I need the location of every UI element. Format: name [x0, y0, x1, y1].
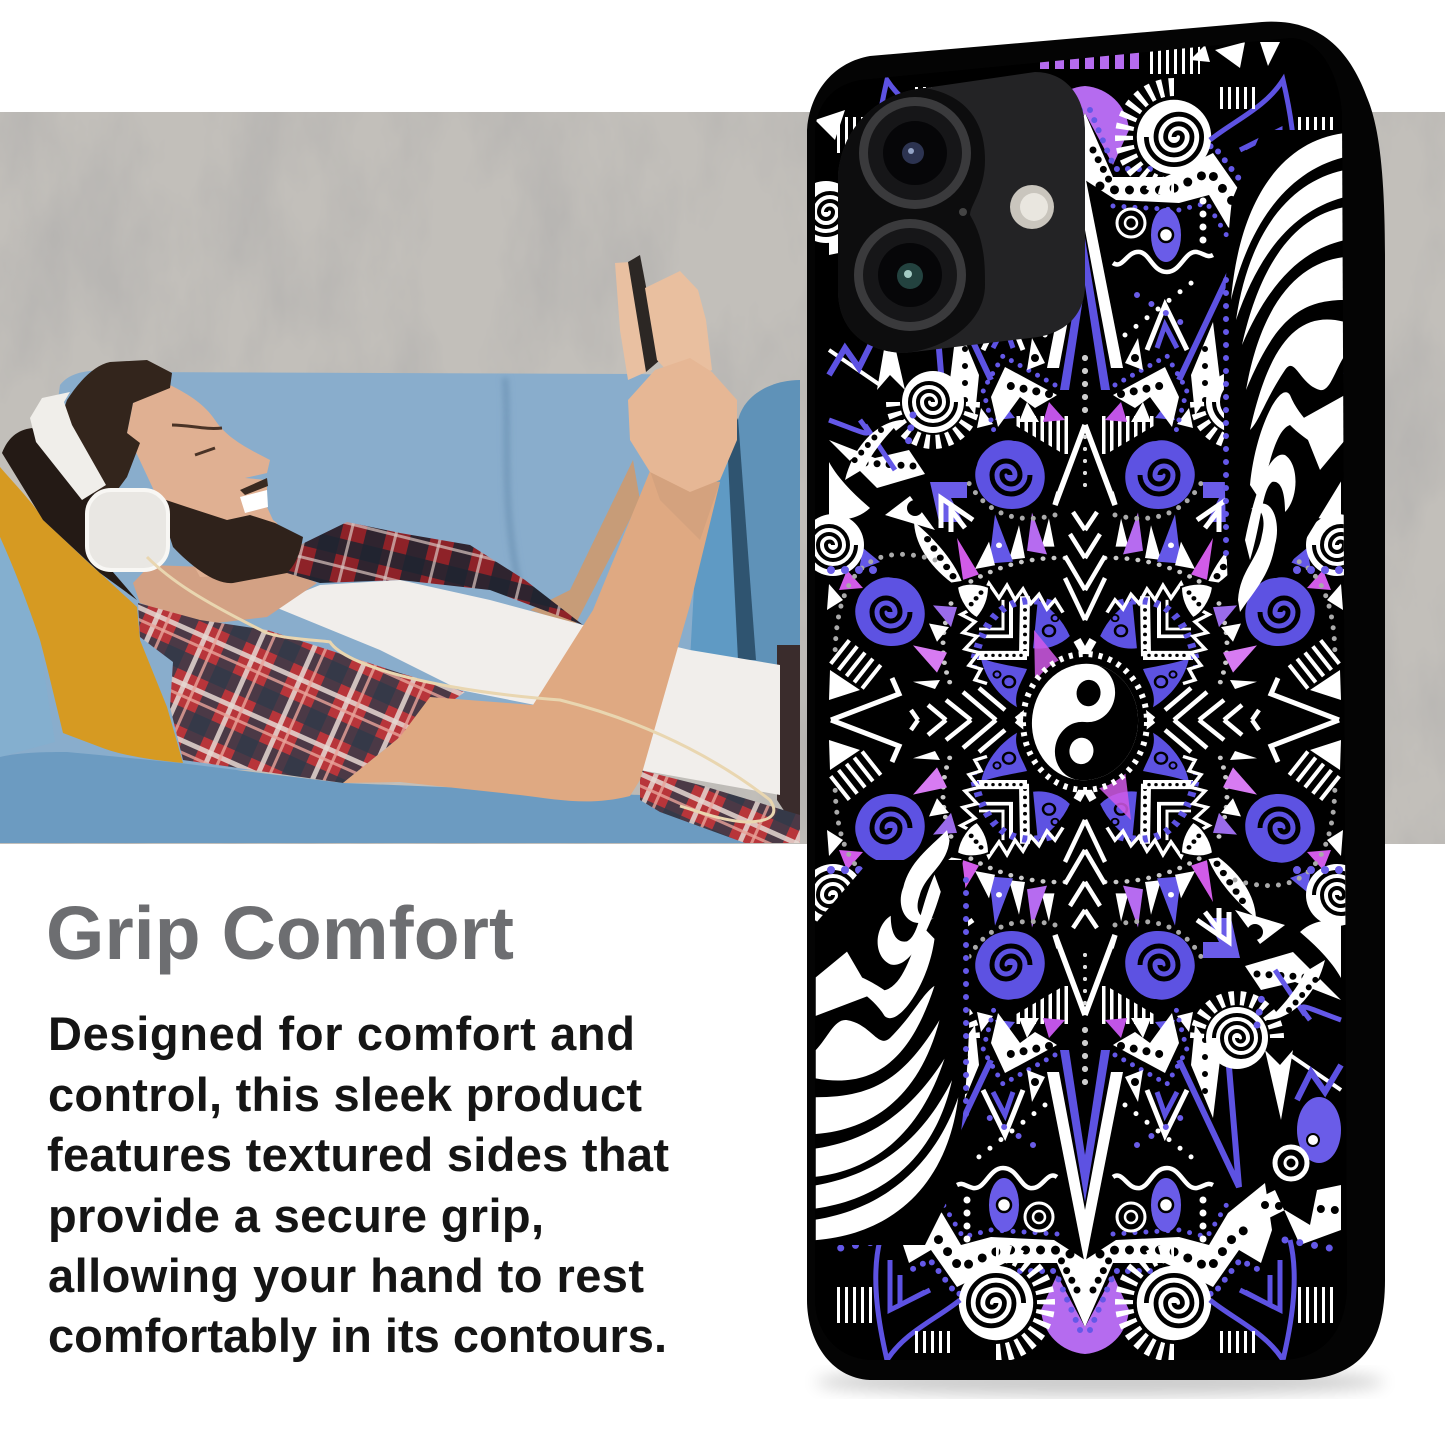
- panel: lifestyle photo: [0, 112, 1445, 844]
- magenta highlights: [1034, 630, 1131, 820]
- sofa back: [0, 371, 745, 770]
- beard: [157, 497, 303, 583]
- jeans: [777, 645, 800, 835]
- mandala screen: [795, 30, 1368, 1365]
- wave stripes top right: [1224, 130, 1348, 612]
- lower shirt hem: [640, 770, 800, 843]
- white t-shirt: [270, 580, 780, 795]
- phone in hand: [628, 255, 660, 372]
- lens housing: [838, 88, 985, 353]
- top left spiral: [815, 181, 838, 243]
- flash: [1010, 185, 1054, 229]
- fingers: [645, 271, 712, 385]
- mouth: [240, 490, 268, 513]
- lower lens: [854, 219, 966, 331]
- phone shadow: [815, 1368, 1385, 1396]
- body text: [47, 1007, 669, 1362]
- body text: provide a secure grip,: [48, 1189, 544, 1242]
- bottom right eye motif: [1275, 1097, 1341, 1179]
- arm: [343, 471, 720, 801]
- sofa creases: [170, 378, 520, 590]
- sofa middle strip: [690, 440, 740, 660]
- headphone ear cup: [87, 490, 168, 570]
- phone case: [795, 22, 1385, 1380]
- top strip motifs: [815, 42, 1280, 140]
- wave stripes bottom left: [810, 830, 970, 1245]
- wall texture: [0, 112, 1445, 844]
- plaid sleeve: [138, 603, 465, 783]
- sofa right arm: [738, 380, 800, 680]
- face: [127, 385, 287, 577]
- fist: [628, 358, 737, 492]
- heading: Grip Comfort: [46, 891, 514, 975]
- back arm: [530, 460, 640, 625]
- top hair: [60, 360, 172, 500]
- yellow pillow: [0, 467, 183, 763]
- body text: Designed for comfort and: [48, 1007, 635, 1060]
- body text: comfortably in its contours.: [48, 1309, 667, 1362]
- body text: allowing your hand to rest: [48, 1249, 644, 1302]
- case body: [807, 22, 1385, 1380]
- neck: [133, 565, 317, 625]
- man: [2, 255, 800, 843]
- wall background: [0, 112, 1445, 844]
- dotted ring around the yin yang: [1023, 654, 1147, 790]
- headphone band: [30, 392, 106, 500]
- body text: control, this sleek product: [48, 1068, 642, 1121]
- sofa left arm: [0, 537, 55, 757]
- plaid collar: [287, 522, 583, 625]
- quadrants: [802, 80, 1368, 1360]
- moustache: [240, 478, 268, 495]
- sofa seat: [0, 752, 800, 843]
- body text: features textured sides that: [47, 1128, 669, 1181]
- arm shadow: [650, 471, 720, 540]
- sofa dark gap: [727, 418, 756, 660]
- camera module: [838, 72, 1085, 353]
- microphone dot: [959, 208, 967, 216]
- eye and brow: [172, 425, 222, 455]
- back hair: [2, 428, 137, 600]
- upper lens: [859, 97, 971, 209]
- palm behind phone: [615, 262, 646, 380]
- yin yang: [1032, 664, 1138, 780]
- headphone cord: [147, 557, 774, 822]
